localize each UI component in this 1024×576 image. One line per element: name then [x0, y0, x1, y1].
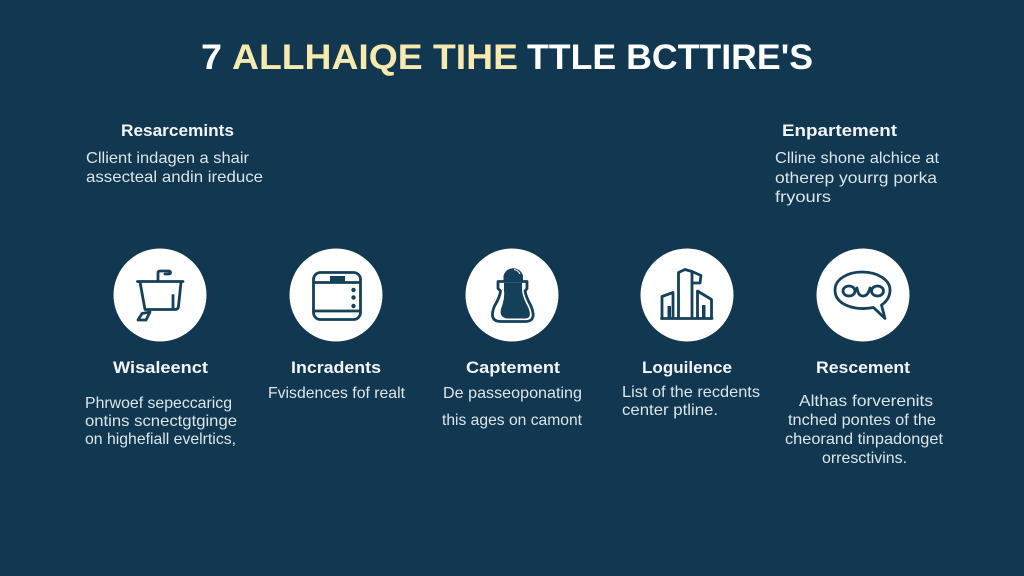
- title: [201, 38, 813, 77]
- text block: Enpartement: Enpartement: [782, 121, 897, 140]
- text block: Wisaleenct: [85, 358, 237, 448]
- text block: Rescement: tnched pontes of the: [788, 412, 936, 429]
- text block: Loguilence: List of the recdents: [622, 384, 760, 401]
- icon: city buildings: [640, 248, 734, 342]
- icon: bottle: [466, 248, 558, 342]
- text block: Wisaleenct: ontins scnectgtginge: [85, 413, 237, 430]
- text block: Enpartement: otherep yourrg porka: [775, 170, 937, 187]
- text block: Rescement: [785, 358, 944, 467]
- text block: Loguilence: [622, 358, 760, 419]
- text block: Rescement: orresctivins.: [822, 450, 907, 467]
- text block: Incradents: Fvisdences fof realt: [268, 385, 406, 402]
- text block: Wisaleenct: Phrwoef sepeccaricg: [85, 395, 232, 412]
- icon: sink basket: [114, 248, 206, 342]
- text block: Wisaleenct: on highefiall evelrtics,: [85, 431, 236, 448]
- icon: oven: [290, 248, 382, 342]
- text block: Resarcemints: assecteal andin ireduce: [86, 169, 263, 186]
- text block: Resarcemints: [86, 121, 263, 186]
- text block: Wisaleenct: Wisaleenct: [113, 358, 208, 377]
- text block: Captement: Captement: [466, 358, 560, 377]
- text block: Enpartement: [775, 121, 940, 206]
- icon: speech bubble: [816, 248, 910, 342]
- title: 7: [201, 38, 222, 77]
- text block: Loguilence: Loguilence: [642, 358, 732, 377]
- text block: Captement: De passeoponating: [443, 385, 582, 402]
- text block: Enpartement: Clline shone alchice at: [775, 150, 940, 167]
- text block: Rescement: cheorand tinpadonget: [785, 431, 944, 448]
- text block: Resarcemints: Cllient indagen a shair: [86, 150, 250, 167]
- text block: Resarcemints: Resarcemints: [121, 121, 234, 140]
- title: ALLHAIQE TIHE: [232, 38, 518, 77]
- text block: Captement: [442, 358, 583, 429]
- text block: Incradents: Incradents: [291, 358, 381, 377]
- text block: Rescement: Rescement: [816, 358, 910, 377]
- text block: Incradents: [268, 358, 406, 402]
- text block: Enpartement: fryours: [775, 189, 831, 206]
- title: TTLE BCTTIRE'S: [527, 38, 813, 77]
- text block: Loguilence: center ptline.: [622, 402, 718, 419]
- text block: Rescement: Althas forverenits: [799, 393, 933, 410]
- text block: Captement: this ages on camont: [442, 412, 583, 429]
